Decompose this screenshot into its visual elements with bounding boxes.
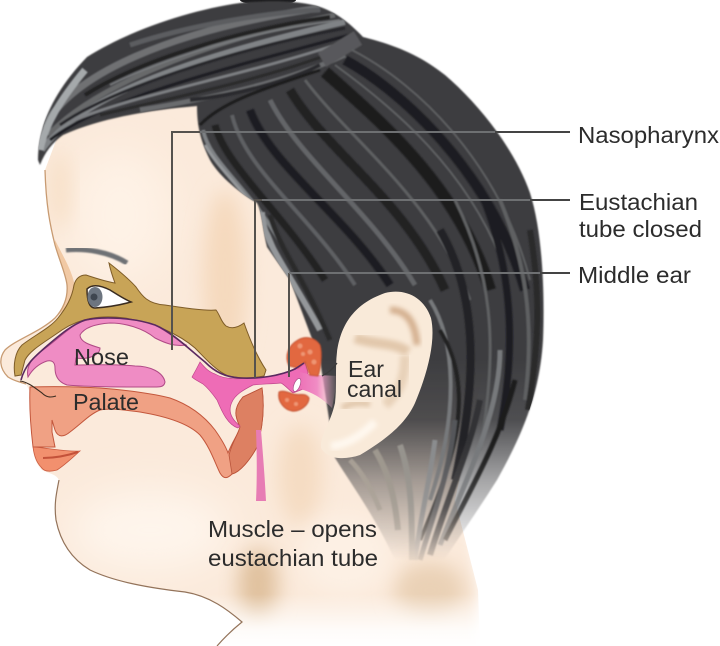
airway roof line <box>21 318 304 380</box>
label: Middle ear: Middle ear <box>578 262 691 288</box>
leader line: Nasopharynx <box>172 132 570 350</box>
hair knot at top <box>240 0 296 5</box>
canal edge <box>322 363 337 376</box>
leader line: Eustachian tube closed <box>255 200 570 378</box>
palate and jaw <box>30 387 263 478</box>
label: Muscle opens eustachian tube: Muscle – opens <box>208 516 377 542</box>
canal fade <box>300 372 338 408</box>
skin shading <box>50 150 466 621</box>
nasal bone <box>14 263 266 378</box>
label: Nasopharynx: Nasopharynx <box>578 122 720 148</box>
front hair strands <box>40 8 352 150</box>
ear <box>321 292 433 458</box>
label: Ear canal <box>347 356 402 402</box>
label: Ear canal: canal <box>347 376 402 402</box>
label: Eustachian tube closed: tube closed <box>579 216 702 242</box>
ear tube muscle <box>256 430 266 501</box>
label: Palate: Palate <box>73 389 139 415</box>
eyebrow <box>66 250 127 263</box>
middle ear glands <box>279 338 321 411</box>
face and neck skin <box>1 95 500 646</box>
label: Eustachian tube closed <box>579 189 702 242</box>
hair <box>38 1 544 585</box>
label: Eustachian tube closed: Eustachian <box>579 189 698 215</box>
nasopharynx and eustachian tube <box>192 362 308 428</box>
nostril line <box>20 381 56 397</box>
eardrum opening <box>292 377 302 393</box>
label: Ear canal: Ear <box>348 356 384 382</box>
nasal cavity <box>28 318 186 387</box>
back hair strands <box>200 50 537 560</box>
jaw muscle <box>229 388 263 474</box>
outline: forehead and nose <box>1 170 67 384</box>
hair band at crown <box>322 38 358 60</box>
panel: head illustration <box>1 0 545 646</box>
eye <box>87 286 131 308</box>
lips <box>33 447 80 471</box>
outline: chin and jaw <box>55 480 242 646</box>
label: Muscle opens eustachian tube: eustachian tube <box>208 545 378 571</box>
neck fade to white <box>205 490 545 646</box>
label: Nose: Nose <box>74 344 129 370</box>
leader line: Middle ear <box>289 273 570 377</box>
label: Muscle opens eustachian tube <box>208 516 378 571</box>
